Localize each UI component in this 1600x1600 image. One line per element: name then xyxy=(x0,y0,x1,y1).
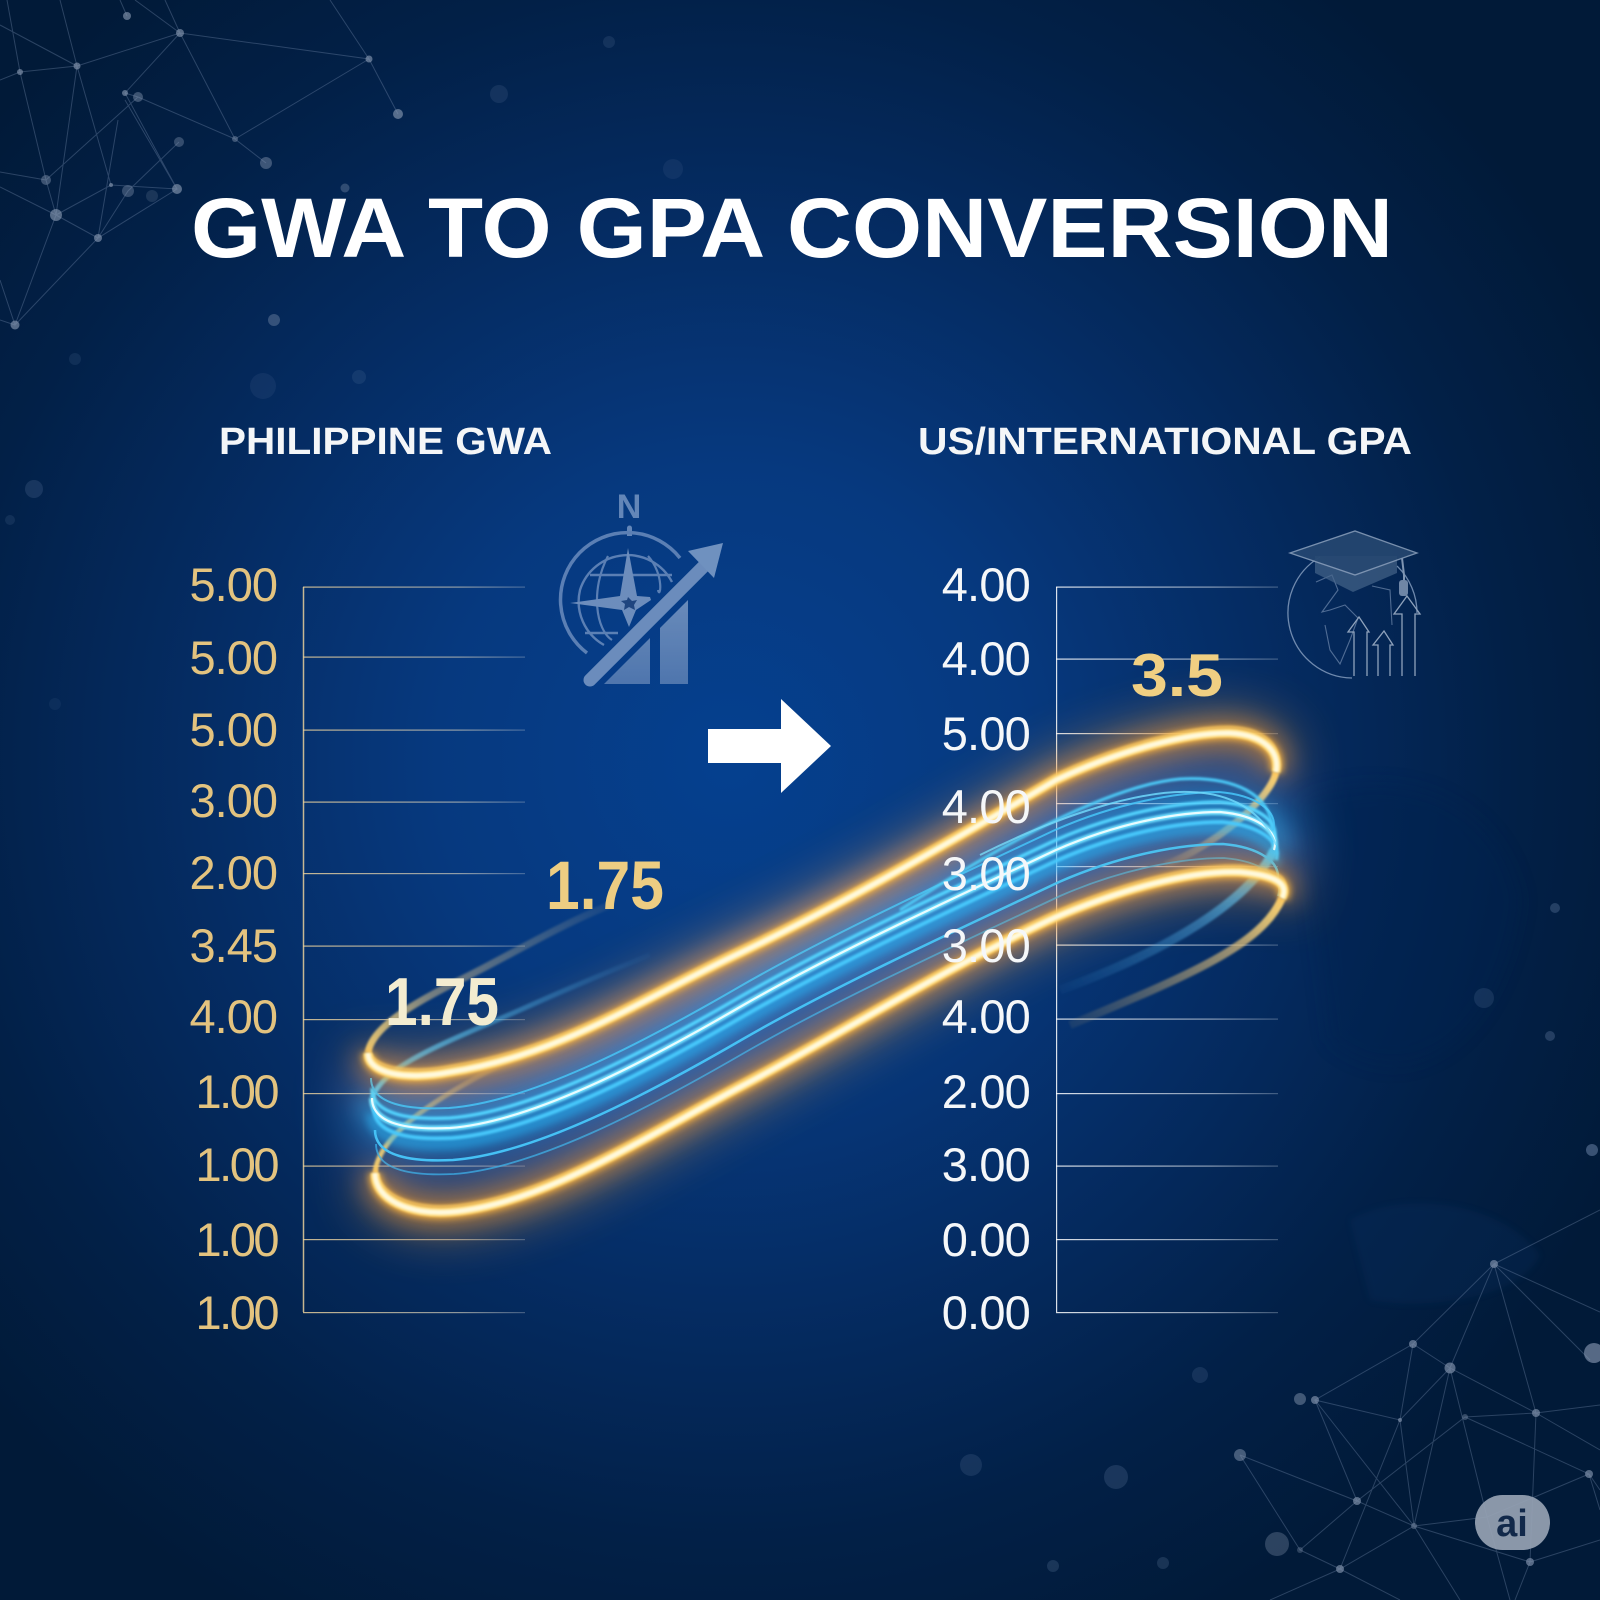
ai badge xyxy=(1475,1495,1550,1550)
left scale labels: 5.00 xyxy=(190,631,277,684)
right scale labels: 3.00 xyxy=(942,847,1030,900)
callout: 3.5: 3.5 xyxy=(1131,642,1223,709)
left scale labels: 1.00 xyxy=(196,1286,278,1339)
right scale labels: 4.00 xyxy=(942,558,1030,611)
left scale labels: 1.00 xyxy=(196,1213,278,1266)
left scale labels: 5.00 xyxy=(190,558,277,611)
ribbon halo xyxy=(368,733,1284,1212)
network decoration: top left xyxy=(0,0,403,330)
gold ribbon bottom xyxy=(375,866,1285,1212)
right axis and gridlines xyxy=(1056,586,1278,1313)
left scale labels: 2.00 xyxy=(190,846,277,899)
left axis and gridlines xyxy=(303,586,525,1313)
left scale labels: 3.45 xyxy=(190,919,277,972)
callout: 1.75 pale: 1.75 xyxy=(385,964,499,1040)
faint back strands xyxy=(368,772,1282,1173)
left scale labels: 1.00 xyxy=(196,1065,278,1118)
left scale labels: 3.00 xyxy=(190,774,277,827)
right scale labels: 0.00 xyxy=(942,1286,1030,1339)
ai badge: ai xyxy=(1496,1503,1528,1545)
network decoration: bottom right xyxy=(1234,1210,1600,1600)
icon: graduation cap on globe with arrows xyxy=(1288,531,1420,678)
left scale labels: 4.00 xyxy=(190,990,277,1043)
left scale labels: 5.00 xyxy=(190,703,277,756)
icon: compass and growth arrow: N xyxy=(617,488,641,526)
right scale labels: 4.00 xyxy=(942,990,1030,1043)
right scale labels: 3.00 xyxy=(942,919,1030,972)
glowing conversion ribbons xyxy=(368,727,1285,1212)
right scale labels: 3.00 xyxy=(942,1138,1030,1191)
right scale labels: 5.00 xyxy=(942,707,1030,760)
right scale labels: 2.00 xyxy=(942,1065,1030,1118)
right scale labels: 4.00 xyxy=(942,780,1030,833)
right scale labels xyxy=(942,558,1030,1339)
arrow xyxy=(708,699,831,793)
blue light strands xyxy=(371,779,1279,1174)
left column heading: PHILIPPINE GWA xyxy=(219,421,552,463)
icon: compass and growth arrow xyxy=(560,488,723,684)
left scale labels: 1.00 xyxy=(196,1138,278,1191)
left scale labels xyxy=(190,558,278,1339)
right column heading: US/INTERNATIONAL GPA xyxy=(918,421,1412,463)
right scale labels: 0.00 xyxy=(942,1213,1030,1266)
title: GWA TO GPA CONVERSION xyxy=(191,181,1393,275)
gold ribbon top xyxy=(368,727,1278,1076)
callout: 1.75 gold: 1.75 xyxy=(546,847,664,924)
right scale labels: 4.00 xyxy=(942,632,1030,685)
